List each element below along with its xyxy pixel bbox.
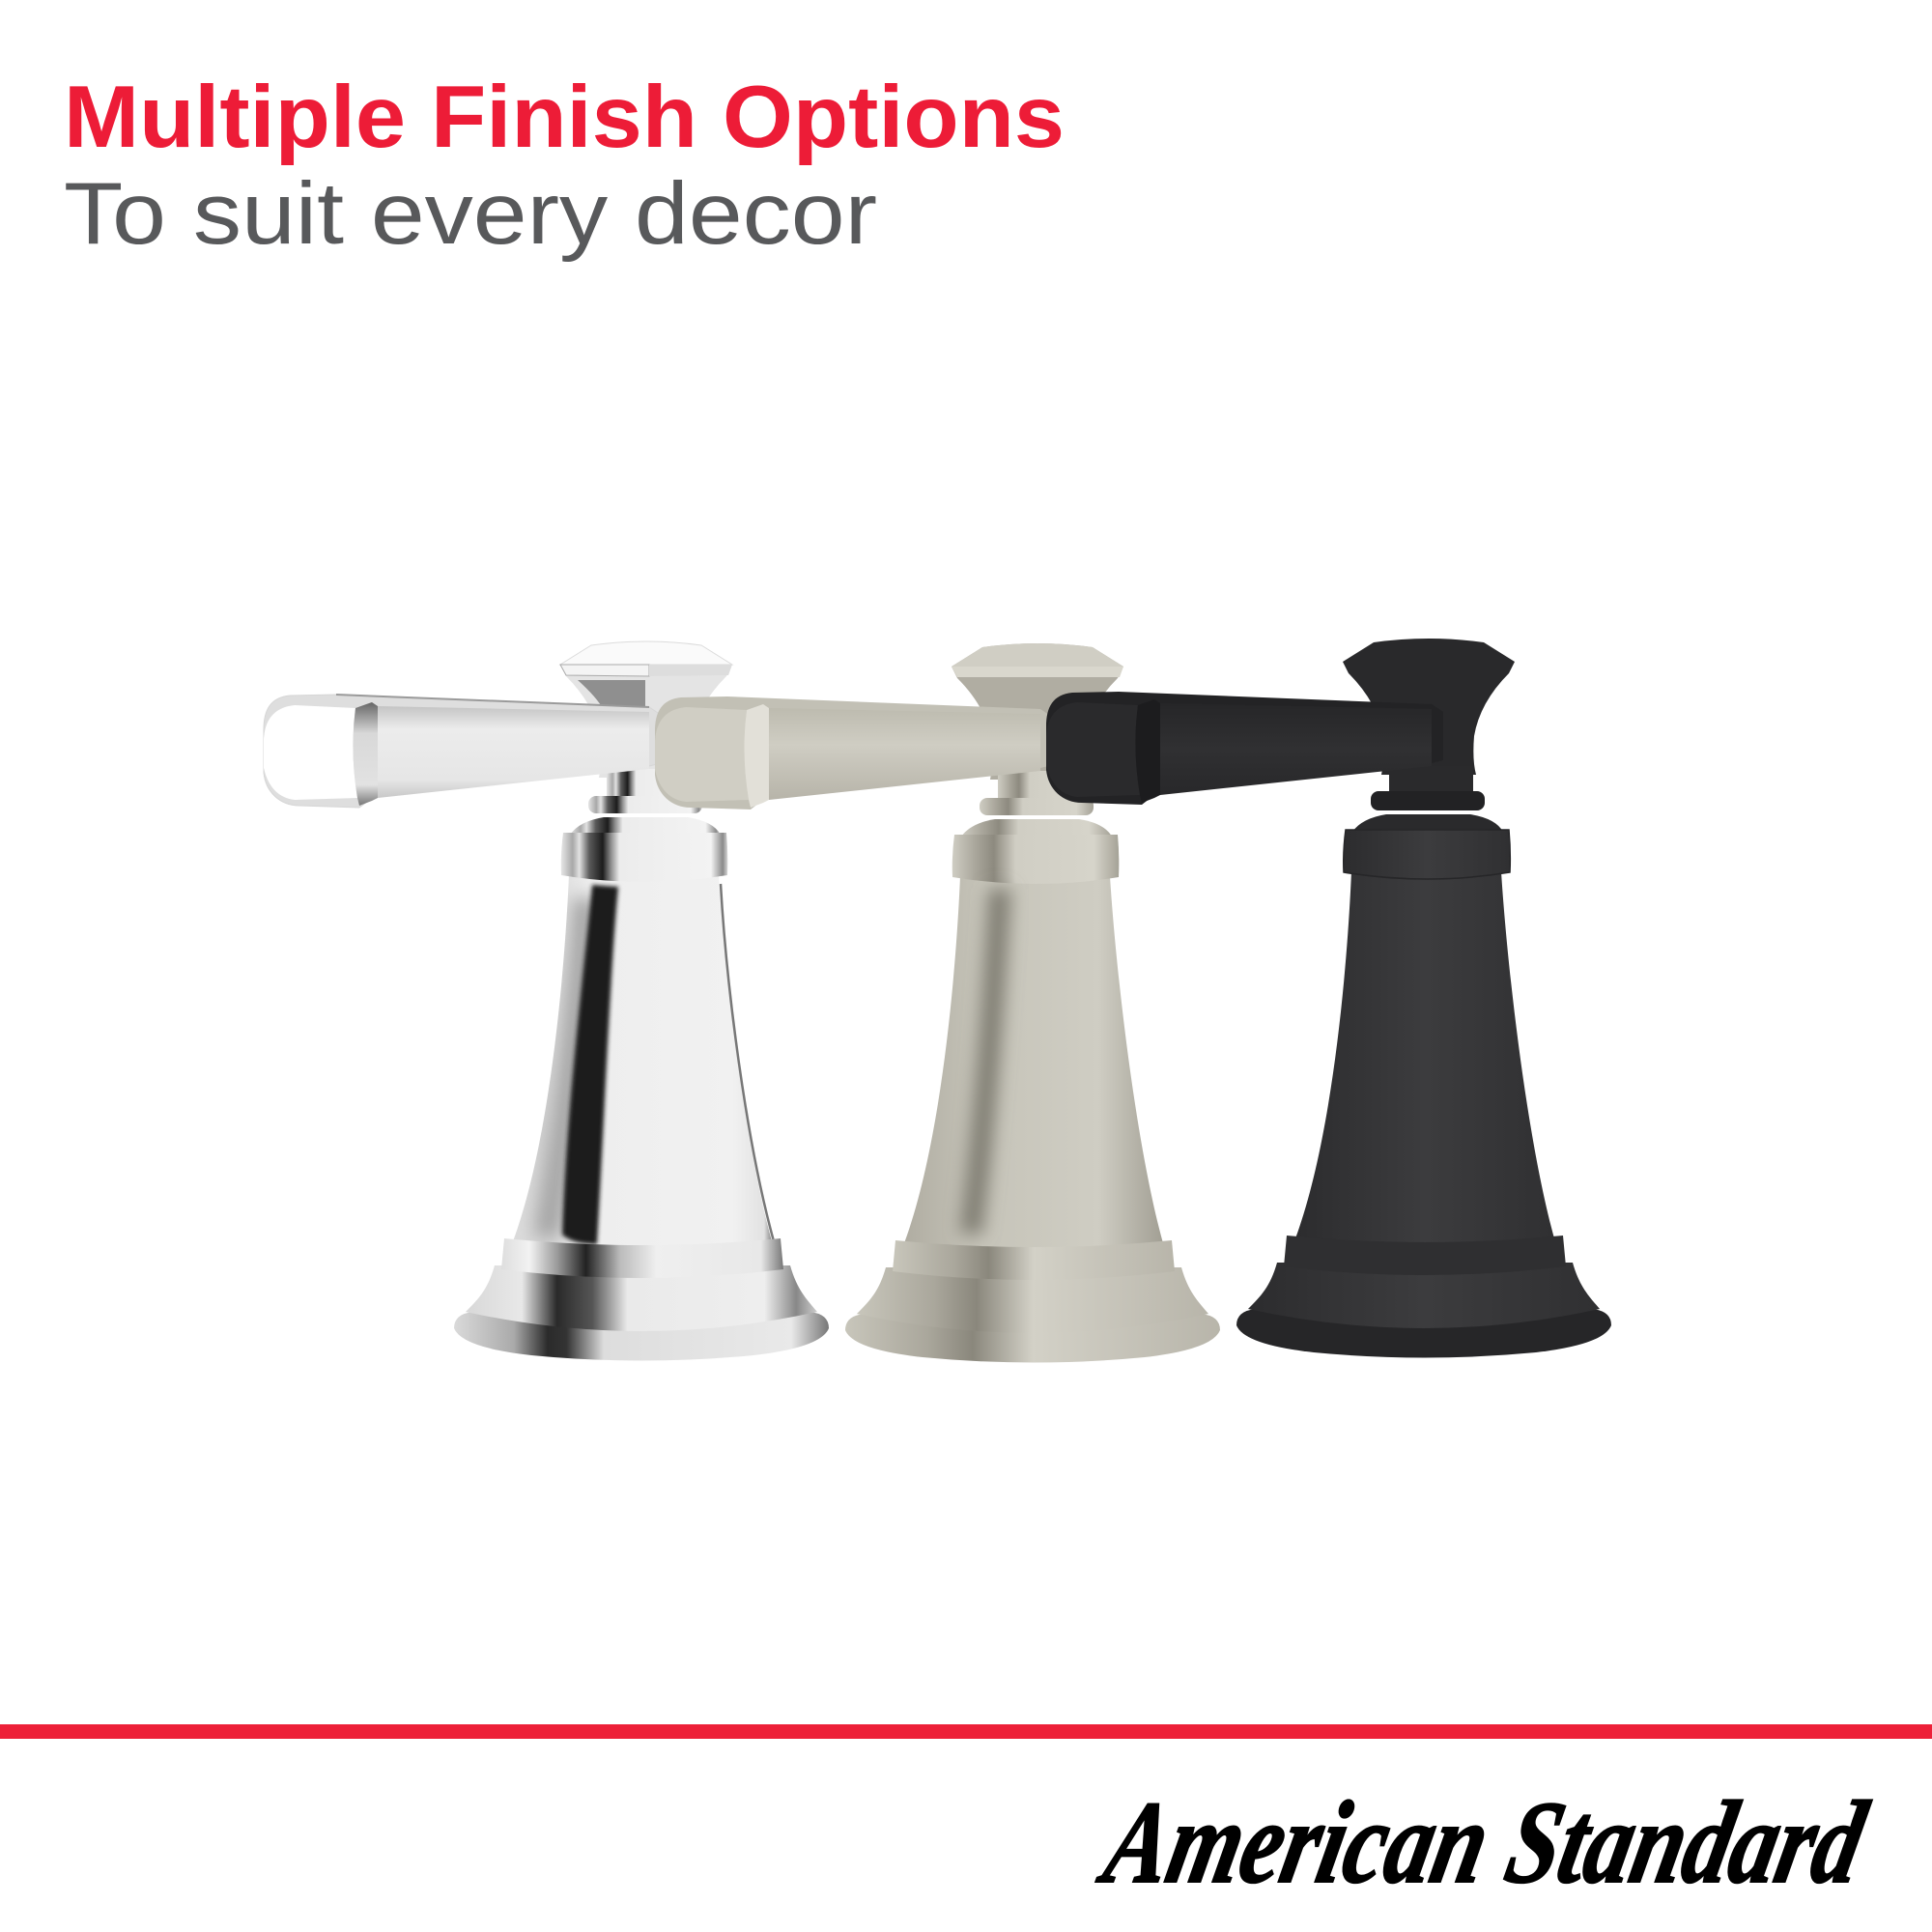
product: chrome faucet handle (264, 641, 829, 1360)
product: matte black faucet handle (1046, 639, 1611, 1358)
red divider bar (0, 1724, 1932, 1739)
title: Multiple Finish Options: Multiple Finish Options (64, 69, 1065, 166)
subtitle: To suit every decor: To suit every decor (64, 165, 877, 263)
product: brushed nickel faucet handle (655, 643, 1220, 1362)
